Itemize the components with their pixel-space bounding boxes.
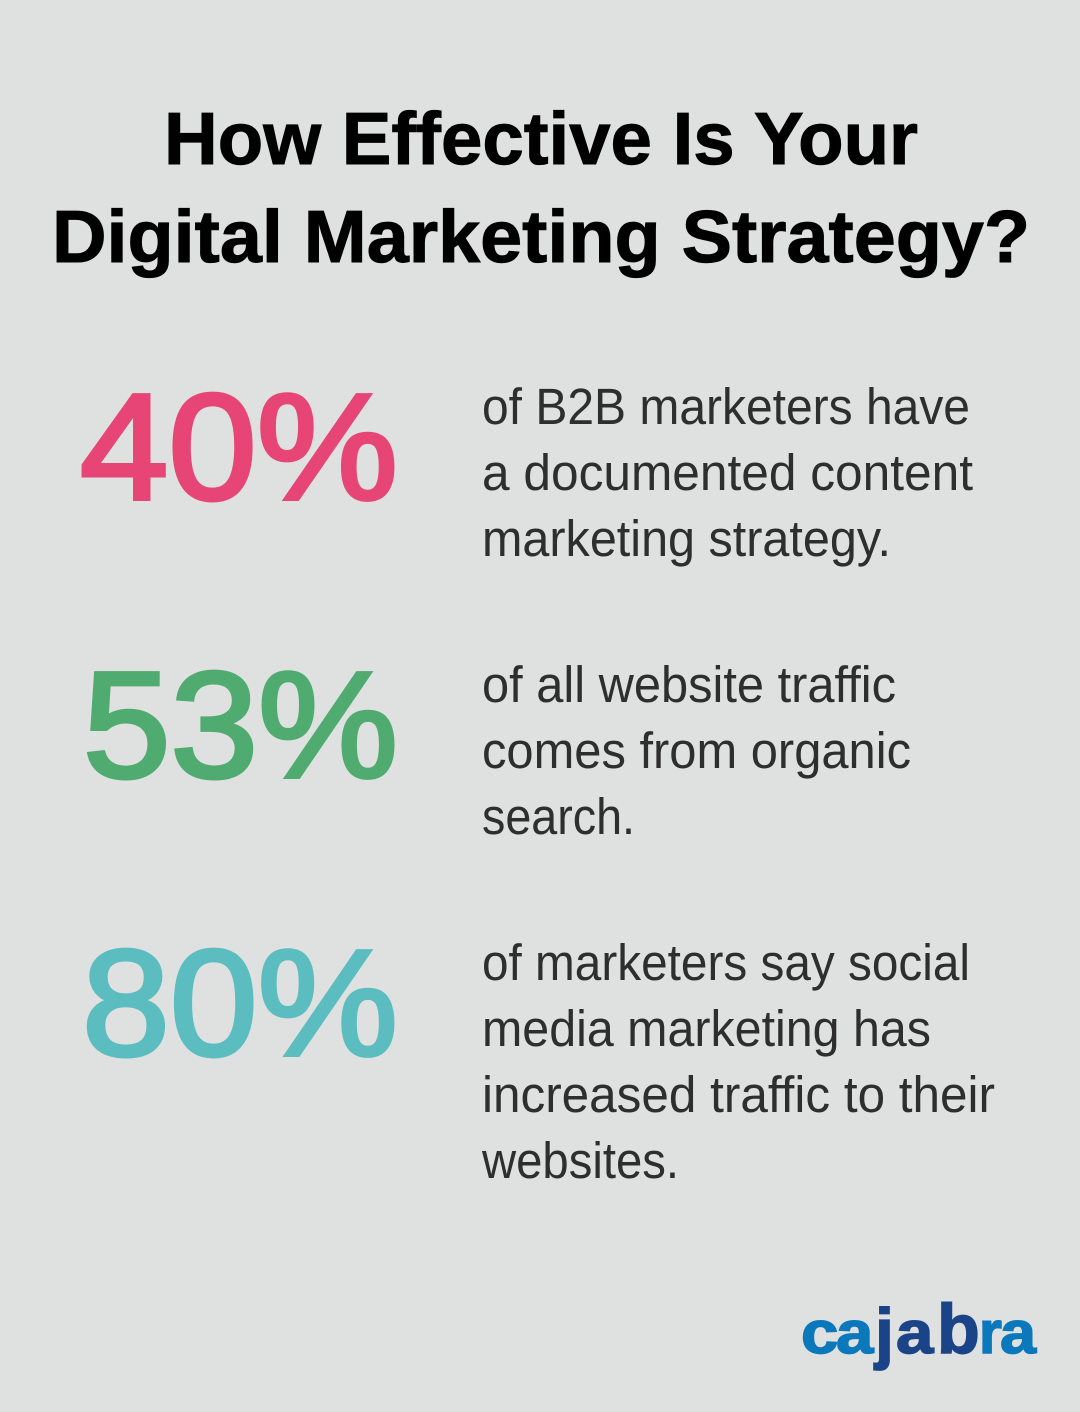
stat text: social media: increased traffic to their — [482, 1066, 995, 1123]
logo: cajabra: b — [937, 1290, 980, 1368]
stat text: social media — [481, 934, 995, 1189]
stat number: 40%: 40% — [80, 362, 398, 531]
logo: cajabra — [801, 1290, 1037, 1371]
logo: cajabra: a — [836, 1299, 874, 1366]
stat text: B2B marketers: of B2B marketers have — [482, 378, 970, 435]
stat: 53% — [83, 640, 911, 845]
stat text: social media: websites. — [481, 1132, 679, 1189]
logo: cajabra: a — [896, 1299, 934, 1366]
stat text: B2B marketers: marketing strategy. — [482, 510, 891, 567]
logo: cajabra: j — [873, 1295, 894, 1371]
stat text: organic search: of all website traffic — [482, 656, 896, 713]
stat text: B2B marketers: a documented content — [482, 444, 973, 501]
logo: cajabra: r — [979, 1299, 1002, 1366]
stat text: social media: of marketers say social — [482, 934, 970, 991]
stat number: 53%: 53% — [83, 640, 398, 809]
stat text: social media: media marketing has — [482, 1000, 931, 1057]
logo: cajabra: a — [1000, 1299, 1037, 1366]
title — [52, 97, 1030, 278]
stat: 40% — [80, 362, 973, 567]
stat text: organic search — [482, 656, 911, 845]
title: How Effective Is Your — [164, 97, 918, 180]
logo: cajabra: c — [801, 1299, 838, 1366]
stat number: 80%: 80% — [82, 918, 398, 1087]
stat: 80% — [82, 918, 995, 1189]
stat text: B2B marketers — [482, 378, 973, 567]
stat text: organic search: search. — [482, 788, 635, 845]
stat text: organic search: comes from organic — [482, 722, 911, 779]
title: Digital Marketing Strategy? — [52, 195, 1030, 278]
